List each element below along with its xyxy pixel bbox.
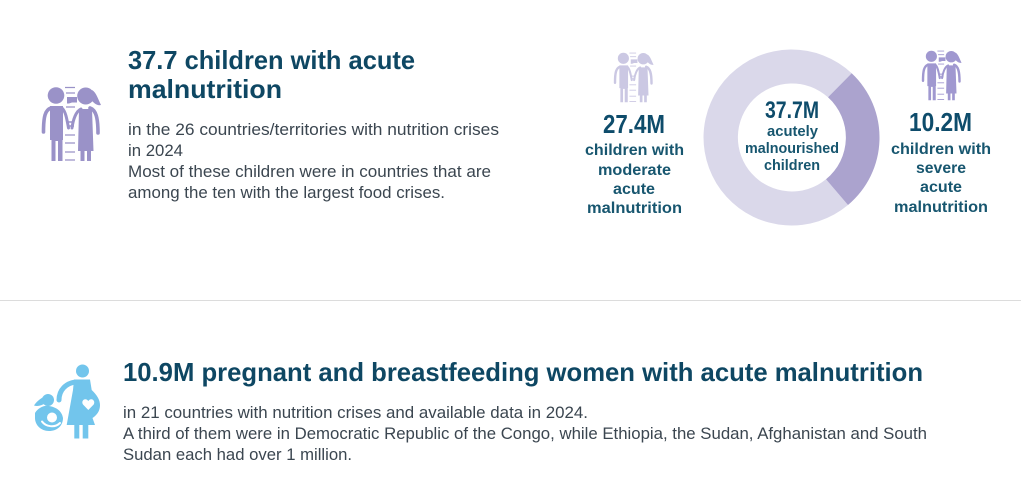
stat: moderate acute malnutrition: 27.4M bbox=[603, 109, 665, 139]
text block: women description: in 21 countries with nutrition crises and available data in 2024. bbox=[123, 404, 588, 422]
donut chart: acutely malnourished children bbox=[704, 50, 880, 226]
stat: severe acute malnutrition: malnutrition bbox=[894, 199, 988, 216]
text block: children description: Most of these children were in countries that are bbox=[128, 163, 491, 181]
stat: severe acute malnutrition: children with bbox=[891, 141, 991, 158]
text block: children description: in 2024 bbox=[128, 142, 183, 160]
heading: children with acute malnutrition: 37.7 children with acute bbox=[128, 45, 415, 75]
stat: severe acute malnutrition: acute bbox=[920, 179, 962, 196]
stat: moderate acute malnutrition bbox=[585, 109, 684, 217]
heading: children with acute malnutrition bbox=[128, 45, 415, 104]
text block: women description: A third of them were in Democratic Republic of the Congo, while Ethiopia, the Sudan, Afghanistan and South bbox=[123, 425, 927, 443]
heading: children with acute malnutrition: malnutrition bbox=[128, 74, 282, 104]
stat: severe acute malnutrition bbox=[891, 107, 991, 216]
text block: children description bbox=[128, 121, 499, 202]
icon: severe malnutrition children bbox=[923, 51, 962, 100]
icon: moderate malnutrition children bbox=[615, 53, 654, 102]
donut centre label: 37.7M bbox=[765, 97, 819, 124]
text block: women description: Sudan each had over 1 million. bbox=[123, 446, 352, 464]
text block: children description: among the ten with the largest food crises. bbox=[128, 184, 445, 202]
stat: moderate acute malnutrition: moderate bbox=[598, 162, 671, 179]
stat: severe acute malnutrition: 10.2M bbox=[909, 107, 972, 137]
donut segment: severe bbox=[826, 73, 880, 205]
donut centre label: acutely bbox=[767, 124, 818, 140]
icon: two children being measured bbox=[44, 87, 101, 161]
donut centre label: children bbox=[764, 158, 820, 174]
heading: pregnant and breastfeeding women: 10.9M pregnant and breastfeeding women with acute malnutrition bbox=[123, 357, 923, 387]
stat: moderate acute malnutrition: malnutrition bbox=[587, 200, 682, 217]
text block: children description: in the 26 countries/territories with nutrition crises bbox=[128, 121, 499, 139]
icon: pregnant and breastfeeding women bbox=[34, 364, 100, 438]
stat: severe acute malnutrition: severe bbox=[916, 160, 966, 177]
donut centre label: malnourished bbox=[745, 141, 839, 157]
donut centre label bbox=[745, 97, 839, 174]
stat: moderate acute malnutrition: children with bbox=[585, 142, 684, 159]
text block: women description bbox=[123, 404, 927, 464]
donut segment: moderate bbox=[704, 50, 852, 226]
stat: moderate acute malnutrition: acute bbox=[613, 181, 655, 198]
